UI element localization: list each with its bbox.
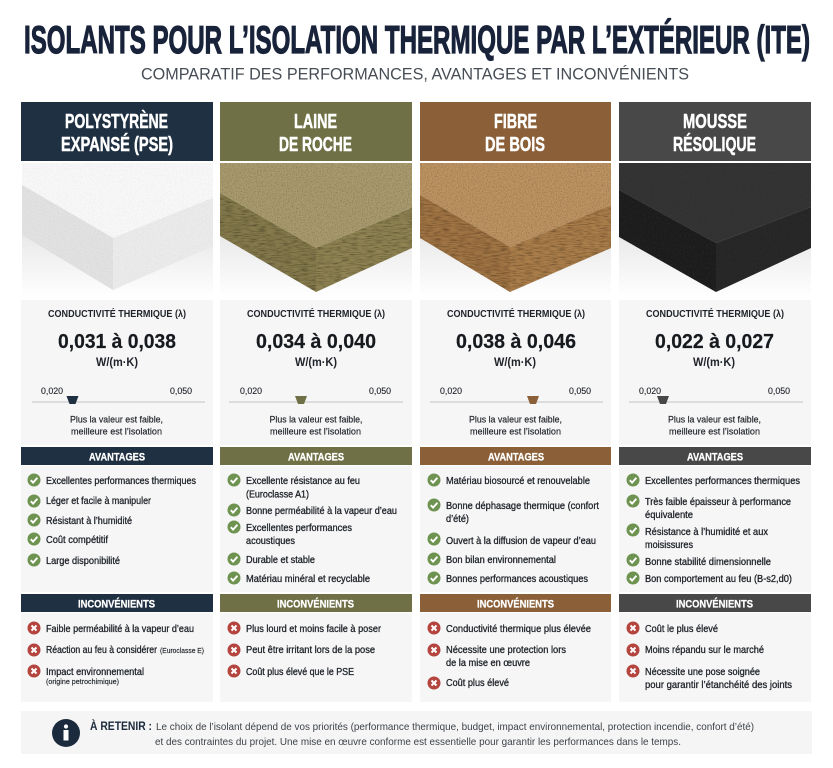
header: fibre de bois <box>420 102 611 161</box>
list: avantages wood fibre: Bonne déphasage thermique (confort <box>446 501 599 512</box>
panel: conductivity rock wool: W/(m·K) <box>295 355 337 369</box>
list: avantages wood fibre <box>420 466 611 592</box>
bar: inconvénients rock wool <box>220 594 412 612</box>
list: inconvénients wood fibre: Nécessite une protection lors <box>446 645 566 656</box>
panel: conductivity PSE: 0,031 à 0,038 <box>58 330 176 353</box>
bar: avantages rock wool <box>220 447 412 465</box>
list: avantages rock wool <box>220 466 412 592</box>
panel: conductivity rock wool <box>220 300 412 445</box>
list: avantages PSE: Résistant à l’humidité <box>46 516 132 527</box>
list: inconvénients PSE: (Euroclasse E) <box>160 648 204 655</box>
callout: à retenir <box>21 711 812 754</box>
list: inconvénients rock wool: Coût plus élevé que le PSE <box>246 667 354 678</box>
list: inconvénients phenolic foam: Coût le plus élevé <box>645 624 718 635</box>
bar: inconvénients wood fibre <box>420 594 611 612</box>
header: laine de roche: DE ROCHE <box>279 133 352 156</box>
header: fibre de bois: FIBRE <box>494 110 537 133</box>
panel: conductivity phenolic foam: 0,020 <box>639 386 661 396</box>
callout: à retenir: À RETENIR : <box>90 720 152 733</box>
panel: conductivity rock wool: CONDUCTIVITÉ THERMIQUE (λ) <box>247 307 385 320</box>
list: avantages phenolic foam: Résistance à l’humidité et aux <box>645 527 768 538</box>
list: avantages rock wool: Excellentes performances <box>246 523 352 534</box>
list: inconvénients wood fibre: de la mise en œuvre <box>446 658 530 669</box>
panel: conductivity PSE <box>21 300 213 445</box>
list: inconvénients wood fibre: Conductivité thermique plus élevée <box>446 624 591 635</box>
list: avantages phenolic foam: équivalente <box>645 510 693 521</box>
photo: phenolic foam panel <box>619 163 811 298</box>
list: avantages PSE: Léger et facile à manipuler <box>46 496 152 507</box>
panel: conductivity wood fibre: 0,020 <box>440 386 462 396</box>
column: polystyrène expansé <box>21 102 213 702</box>
panel: conductivity wood fibre: W/(m·K) <box>494 355 536 369</box>
bar: inconvénients rock wool: INCONVÉNIENTS <box>277 598 354 610</box>
panel: conductivity rock wool: 0,034 à 0,040 <box>256 330 376 353</box>
panel: conductivity PSE: CONDUCTIVITÉ THERMIQUE (λ) <box>48 307 186 320</box>
panel: conductivity wood fibre: 0,038 à 0,046 <box>456 330 576 353</box>
photo: wood fibre panel <box>420 163 611 298</box>
header: mousse résolique <box>619 102 811 161</box>
panel: conductivity PSE: 0,050 <box>170 386 192 396</box>
list: inconvénients rock wool <box>220 613 412 702</box>
callout: à retenir: et des contraintes du projet. Une mise en œuvre conforme est essentielle pour garantir les performances dans le temps. <box>155 736 681 748</box>
bar: inconvénients PSE <box>21 594 213 612</box>
panel: conductivity wood fibre: CONDUCTIVITÉ THERMIQUE (λ) <box>447 307 585 320</box>
list: inconvénients PSE: Impact environnemental <box>46 667 144 678</box>
list: inconvénients PSE <box>21 613 213 702</box>
bar: avantages wood fibre: AVANTAGES <box>488 452 544 464</box>
panel: conductivity rock wool: meilleure est l’isolation <box>270 426 361 438</box>
bar: avantages PSE <box>21 447 213 465</box>
list: avantages phenolic foam: Excellentes performances thermiques <box>645 476 800 487</box>
header: PSE: EXPANSÉ (PSE) <box>61 133 173 156</box>
list: inconvénients PSE: Réaction au feu à considérer <box>46 645 158 656</box>
bar: avantages rock wool: AVANTAGES <box>288 452 344 464</box>
list: inconvénients PSE: Faible perméabilité à la vapeur d’eau <box>46 624 194 635</box>
list: avantages rock wool: Matériau minéral et recyclable <box>246 574 370 585</box>
panel: conductivity PSE: meilleure est l’isolation <box>71 426 162 438</box>
header: PSE <box>21 102 213 161</box>
subtitle: COMPARATIF DES PERFORMANCES, AVANTAGES ET INCONVÉNIENTS <box>141 64 689 84</box>
list: avantages wood fibre: d’été) <box>446 514 469 525</box>
column: fibre de bois <box>420 102 611 702</box>
header: fibre de bois: DE BOIS <box>485 133 545 156</box>
callout: à retenir: Le choix de l’isolant dépend de vos priorités (performance thermique, budget, impact environnemental, protection incendie, confort d’été) <box>156 721 754 733</box>
list: avantages phenolic foam: moisissures <box>645 540 693 551</box>
panel: conductivity phenolic foam: 0,022 à 0,027 <box>655 330 774 353</box>
list: avantages rock wool: (Euroclasse A1) <box>246 490 309 500</box>
bar: inconvénients phenolic foam: INCONVÉNIENTS <box>676 598 753 610</box>
list: inconvénients phenolic foam <box>619 613 811 702</box>
header: laine de roche <box>220 102 412 161</box>
list: avantages rock wool: acoustiques <box>246 536 295 547</box>
list: avantages rock wool: Excellente résistance au feu <box>246 476 360 487</box>
bar: inconvénients wood fibre: INCONVÉNIENTS <box>477 598 554 610</box>
list: inconvénients phenolic foam: Moins répandu sur le marché <box>645 645 764 656</box>
list: avantages rock wool: Bonne perméabilité à la vapeur d’eau <box>246 506 397 517</box>
panel: conductivity phenolic foam: meilleure est l’isolation <box>669 426 760 438</box>
list: avantages phenolic foam <box>619 466 811 592</box>
header: mousse résolique: MOUSSE <box>683 110 747 133</box>
list: avantages phenolic foam: Bonne stabilité dimensionnelle <box>645 557 771 568</box>
panel: conductivity wood fibre: Plus la valeur est faible, <box>469 414 562 426</box>
list: avantages PSE: Coût compétitif <box>46 535 108 546</box>
icon: info <box>52 719 80 747</box>
list: inconvénients rock wool: Plus lourd et moins facile à poser <box>246 624 382 635</box>
panel: conductivity phenolic foam: CONDUCTIVITÉ THERMIQUE (λ) <box>646 307 784 320</box>
header: laine de roche: LAINE <box>294 110 337 133</box>
panel: conductivity PSE: 0,020 <box>41 386 63 396</box>
list: avantages wood fibre: Matériau biosourcé et renouvelable <box>446 476 590 487</box>
panel: conductivity PSE: Plus la valeur est faible, <box>70 414 163 426</box>
panel: conductivity rock wool: 0,050 <box>369 386 391 396</box>
panel: conductivity rock wool: 0,020 <box>240 386 262 396</box>
panel: conductivity phenolic foam: W/(m·K) <box>693 355 735 369</box>
list: inconvénients rock wool: Peut être irritant lors de la pose <box>246 645 375 656</box>
list: avantages wood fibre: Bonnes performances acoustiques <box>446 574 588 585</box>
panel: conductivity phenolic foam: 0,050 <box>768 386 790 396</box>
bar: avantages wood fibre <box>420 447 611 465</box>
panel: conductivity phenolic foam: Plus la valeur est faible, <box>668 414 761 426</box>
list: avantages rock wool: Durable et stable <box>246 555 315 566</box>
panel: conductivity wood fibre <box>420 300 611 445</box>
photo: PSE panel <box>22 163 213 298</box>
panel: conductivity phenolic foam <box>619 300 811 445</box>
list: inconvénients phenolic foam: pour garantir l’étanchéité des joints <box>645 680 792 691</box>
panel: conductivity PSE: W/(m·K) <box>96 355 138 369</box>
list: inconvénients wood fibre: Coût plus élevé <box>446 678 509 689</box>
panel: conductivity wood fibre: 0,050 <box>569 386 591 396</box>
list: avantages phenolic foam: Très faible épaisseur à performance <box>645 497 791 508</box>
list: avantages wood fibre: Ouvert à la diffusion de vapeur d’eau <box>446 536 596 547</box>
list: inconvénients PSE: (origine petrochimique) <box>46 679 119 686</box>
list: avantages phenolic foam: Bon comportement au feu (B-s2,d0) <box>645 574 792 585</box>
list: avantages PSE <box>21 466 213 592</box>
bar: avantages phenolic foam: AVANTAGES <box>687 452 743 464</box>
header: PSE: POLYSTYRÈNE <box>65 110 168 133</box>
bar: avantages PSE: AVANTAGES <box>89 452 145 464</box>
column: laine de roche <box>220 102 412 702</box>
list: avantages wood fibre: Bon bilan environnemental <box>446 555 556 566</box>
column: mousse résolique <box>619 102 811 702</box>
list: inconvénients wood fibre <box>420 613 611 702</box>
header: mousse résolique: RÉSOLIQUE <box>673 133 756 156</box>
list: avantages PSE: Excellentes performances thermiques <box>46 476 196 487</box>
list: avantages PSE: Large disponibilité <box>46 556 120 567</box>
list: inconvénients phenolic foam: Nécessite une pose soignée <box>645 667 760 678</box>
bar: inconvénients PSE: INCONVÉNIENTS <box>78 598 155 610</box>
panel: conductivity rock wool: Plus la valeur est faible, <box>270 414 362 426</box>
photo: rock wool panel <box>220 163 412 298</box>
panel: conductivity wood fibre: meilleure est l’isolation <box>470 426 561 438</box>
bar: inconvénients phenolic foam <box>619 594 811 612</box>
bar: avantages phenolic foam <box>619 447 811 465</box>
